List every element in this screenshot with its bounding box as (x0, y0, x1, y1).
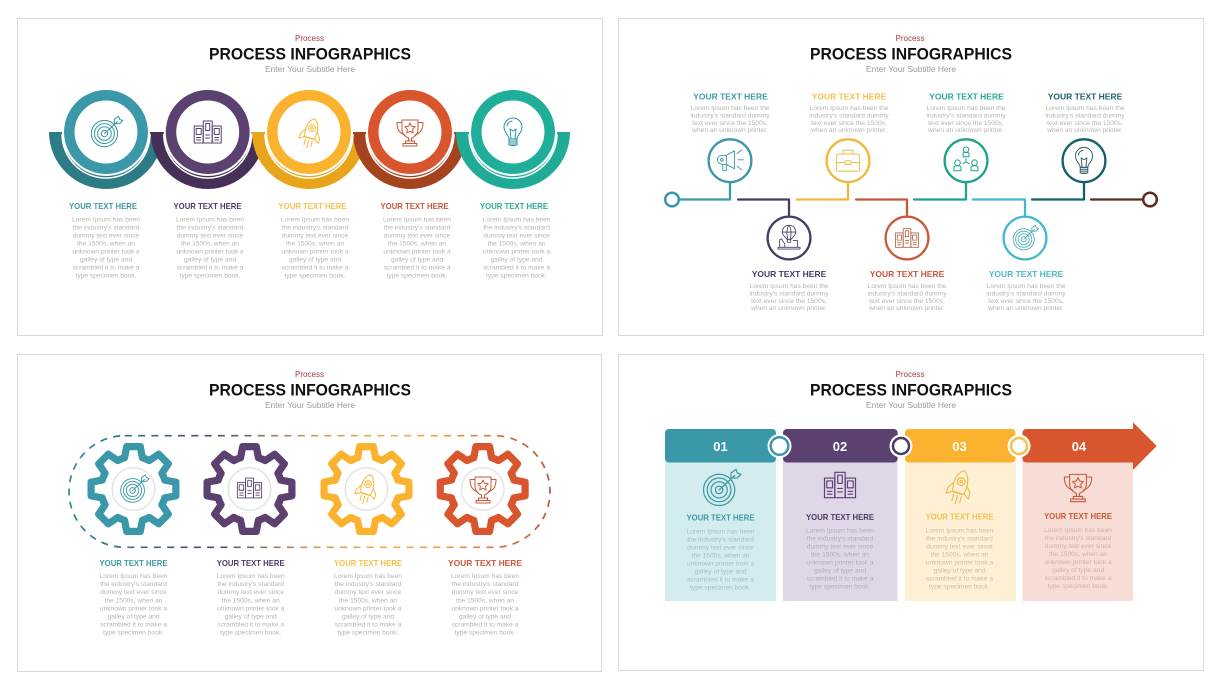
gear text 3: the 1500s, when an (339, 597, 397, 604)
timeline text 4: text ever since the 1500s, (869, 298, 945, 305)
timeline text 3: industry's standard dummy (809, 112, 889, 120)
gear text 2: galley of type and (225, 614, 277, 620)
card 03: YOUR TEXT HERE (926, 512, 994, 522)
timeline text 6: industry's standard dummy (986, 290, 1066, 298)
gear text 4: Lorem Ipsum has been (451, 573, 519, 580)
step 3 text: unknown printer took a (281, 248, 349, 256)
connector ring 2 (890, 434, 912, 458)
card 03: galley of type and (933, 568, 986, 574)
step 2 text: unknown printer took a (176, 248, 244, 256)
timeline text 6: text ever since the 1500s, (988, 298, 1064, 305)
card 01: the industry's standard (687, 536, 754, 544)
gear 3: rocket (324, 447, 409, 531)
card 01: 01 (713, 439, 728, 454)
step 5 text: dummy text ever since (483, 232, 550, 240)
panel: gear process (18, 354, 602, 672)
timeline text 4: when an unknown printer. (868, 305, 945, 312)
timeline connectors (679, 183, 1143, 216)
panel 3 header: PROCESS INFOGRAPHICS (209, 382, 411, 400)
panel 4 header (810, 370, 1012, 410)
half-ring chain (49, 132, 570, 189)
step 3 text: scrambled it to make a (282, 264, 349, 272)
card 01: dummy text ever since (687, 544, 754, 552)
gear text 3: galley of type and (342, 614, 394, 620)
gear text 1: the 1500s, when an (105, 597, 163, 604)
gear text 3: scrambled it to make a (335, 622, 402, 629)
card 04 with arrow header: unknown printer took a (1044, 559, 1112, 566)
timeline text 1: industry's standard dummy (690, 112, 770, 120)
panel 4 header: Process (896, 370, 924, 379)
timeline text 5: YOUR TEXT HERE (929, 92, 1004, 102)
card 03: the 1500s, when an (931, 552, 989, 558)
card 04 with arrow header: type specimen book. (1048, 583, 1109, 590)
step 4 text: the industry's standard (384, 224, 451, 232)
step 3 text: the 1500s, when an (286, 240, 344, 248)
panel 1 header: Enter Your Subtitle Here (265, 64, 355, 74)
card 02: unknown printer took a (806, 560, 874, 566)
gear text 4: unknown printer took a (451, 605, 519, 612)
node: bulb (1063, 139, 1105, 182)
step 1 text: the industry's standard (73, 224, 140, 232)
step 1 text (69, 201, 140, 280)
panel: timeline process (618, 18, 1204, 336)
panel 1 header: PROCESS INFOGRAPHICS (209, 46, 411, 64)
timeline text 7: text ever since the 1500s, (1047, 120, 1123, 127)
panel 2 header (810, 34, 1012, 74)
card 01: scrambled it to make a (687, 576, 754, 584)
gear text 4: the industry's standard (452, 581, 519, 588)
panel: numbered arrow process (618, 354, 1204, 670)
gear text 2 (217, 558, 285, 637)
step 1 text: the 1500s, when an (77, 240, 135, 248)
step 4 text: type specimen book. (387, 272, 448, 280)
panel 1 header (209, 34, 411, 74)
timeline text 1: Lorem Ipsum has been the (690, 105, 770, 112)
step 1 circle: target (62, 95, 150, 178)
timeline text 7 (1045, 92, 1125, 134)
card 03 (905, 429, 1016, 601)
panel 2 header: Process (896, 34, 924, 43)
panel 2 header: PROCESS INFOGRAPHICS (810, 46, 1012, 64)
connector ring 3 (1008, 434, 1030, 458)
timeline text 2: Lorem Ipsum has been the (750, 283, 829, 290)
timeline text 5: Lorem Ipsum has been the (926, 105, 1006, 112)
timeline text 2: YOUR TEXT HERE (752, 269, 827, 279)
step 4 text: scrambled it to make a (384, 264, 451, 272)
step 5 text: the industry's standard (483, 224, 550, 232)
panel 3 header (209, 370, 411, 410)
timeline text 1: YOUR TEXT HERE (693, 92, 768, 102)
step 5 text: type specimen book. (486, 272, 547, 280)
step 4 text: dummy text ever since (384, 232, 451, 240)
step 3 text: dummy text ever since (282, 232, 349, 240)
step 2 text: YOUR TEXT HERE (174, 201, 242, 211)
step 2 text: scrambled it to make a (177, 264, 244, 272)
card 04 with arrow header: the 1500s, when an (1049, 551, 1107, 558)
node: megaphone (709, 139, 751, 182)
gear text 4: scrambled it to make a (452, 622, 519, 629)
card 04 with arrow header: the industry's standard (1045, 535, 1112, 542)
step 3 text: Lorem Ipsum has been (281, 216, 349, 224)
card 02: 02 (833, 439, 847, 454)
step 2 text (174, 201, 244, 280)
card 03: type specimen book. (929, 584, 990, 590)
timeline text 5: when an unknown printer. (927, 127, 1004, 134)
card 02 (783, 429, 898, 601)
timeline text 2 (749, 269, 829, 312)
panel 2 header: Enter Your Subtitle Here (866, 64, 956, 74)
timeline text 4: Lorem Ipsum has been the (868, 283, 947, 290)
gear text 4: dummy text ever since (452, 589, 519, 596)
panel 4 header: Enter Your Subtitle Here (866, 400, 956, 410)
gear text 1: Lorem Ipsum has been (100, 573, 168, 580)
timeline text 6: Lorem Ipsum has been the (986, 283, 1066, 290)
timeline text 5: industry's standard dummy (926, 112, 1006, 120)
card 01: Lorem Ipsum has been (687, 528, 755, 536)
step 3 text: type specimen book. (285, 272, 346, 280)
step 3 circle: rocket (265, 95, 353, 178)
gear text 1: the industry's standard (100, 581, 167, 588)
connector ring 1 (768, 434, 792, 458)
card 02: the 1500s, when an (811, 552, 869, 558)
card 01 (665, 429, 776, 601)
gear text 1 (100, 558, 168, 637)
card 02: Lorem Ipsum has been (806, 528, 874, 534)
timeline text 5 (926, 92, 1006, 134)
timeline text 3: Lorem Ipsum has been the (810, 105, 889, 112)
timeline text 7: Lorem Ipsum has been the (1046, 105, 1125, 112)
step 5 text: the 1500s, when an (488, 240, 546, 248)
timeline text 4: YOUR TEXT HERE (870, 269, 945, 279)
gear text 3: Lorem Ipsum has been (334, 573, 402, 580)
timeline text 5: text ever since the 1500s, (928, 120, 1004, 127)
card 03: scrambled it to make a (926, 576, 993, 582)
step 2 text: dummy text ever since (177, 232, 244, 240)
gear text 3: YOUR TEXT HERE (334, 558, 402, 568)
card 03: unknown printer took a (926, 560, 993, 566)
gear text 2: unknown printer took a (217, 605, 285, 612)
node: buildings (886, 217, 928, 259)
card 03: the industry's standard (926, 536, 993, 542)
panel: circular process (18, 18, 602, 336)
step 1 text: Lorem Ipsum has been (72, 216, 140, 224)
step 2 text: galley of type and (184, 256, 236, 264)
timeline text 6: when an unknown printer. (987, 305, 1064, 312)
step 2 text: type specimen book. (180, 272, 241, 280)
card 02: scrambled it to make a (807, 576, 874, 582)
card 02: galley of type and (814, 568, 866, 574)
gear text 1: galley of type and (107, 614, 160, 620)
step 5 text (480, 201, 551, 280)
gear text 3: type specimen book. (338, 630, 399, 637)
gear text 2: Lorem Ipsum has been (217, 573, 285, 580)
gear text 2: dummy text ever since (217, 589, 284, 596)
timeline text 1: when an unknown printer. (691, 127, 768, 134)
step 5 text: galley of type and (490, 256, 543, 264)
step 2 text: Lorem Ipsum has been (176, 216, 244, 224)
step 5 text: Lorem Ipsum has been (483, 216, 551, 224)
gear text 4: the 1500s, when an (456, 597, 514, 604)
card 04 with arrow header: dummy text ever since (1045, 543, 1112, 550)
step 4 circle: trophy (366, 95, 454, 178)
node: balloon (768, 217, 810, 259)
node: briefcase (827, 139, 869, 182)
card 01: the 1500s, when an (692, 552, 750, 560)
card 03: dummy text ever since (926, 544, 993, 550)
timeline text 6: YOUR TEXT HERE (989, 269, 1064, 279)
gear text 2: type specimen book. (220, 630, 281, 637)
step 4 text: the 1500s, when an (388, 240, 446, 248)
gear text 3: unknown printer took a (334, 605, 402, 612)
card 03: Lorem Ipsum has been (926, 528, 994, 534)
gear text 1: scrambled it to make a (100, 622, 167, 629)
step 3 text: YOUR TEXT HERE (278, 201, 347, 211)
gear text 1: YOUR TEXT HERE (100, 558, 168, 568)
timeline text 2: text ever since the 1500s, (751, 298, 827, 305)
card 04 with arrow header: YOUR TEXT HERE (1044, 511, 1112, 521)
step 2 text: the industry's standard (177, 224, 244, 232)
timeline text 3: when an unknown printer. (810, 127, 887, 134)
step 4 text (380, 201, 451, 280)
timeline end node (1143, 193, 1157, 206)
step 4 text: unknown printer took a (383, 248, 451, 256)
card 02: YOUR TEXT HERE (806, 512, 874, 522)
timeline text 1 (690, 92, 770, 134)
timeline text 7: when an unknown printer. (1046, 127, 1123, 134)
step 5 text: YOUR TEXT HERE (480, 201, 548, 211)
panel 3 header: Process (295, 370, 324, 379)
card 03: 03 (952, 439, 967, 454)
card 04 with arrow header: galley of type and (1052, 567, 1104, 574)
gear text 3: the industry's standard (335, 581, 402, 588)
step 1 text: dummy text ever since (73, 232, 140, 240)
step 1 text: unknown printer took a (72, 248, 140, 256)
gear text 2: YOUR TEXT HERE (217, 558, 285, 568)
card 04 with arrow header (1022, 422, 1157, 601)
gear text 4: galley of type and (459, 614, 511, 620)
gear text 2: the industry's standard (217, 581, 284, 588)
card 04 with arrow header: 04 (1072, 439, 1087, 454)
timeline text 2: industry's standard dummy (749, 290, 829, 298)
panel 1 header: Process (295, 34, 324, 43)
dashed capsule outline (69, 436, 550, 547)
gear text 2: scrambled it to make a (217, 622, 284, 629)
gear text 3: dummy text ever since (335, 589, 402, 596)
timeline text 7: YOUR TEXT HERE (1048, 92, 1123, 102)
step 2 circle: buildings (164, 95, 252, 178)
step 1 text: YOUR TEXT HERE (69, 201, 137, 211)
timeline text 4 (867, 269, 947, 312)
card 04 with arrow header: Lorem Ipsum has been (1044, 527, 1112, 534)
timeline text 1: text ever since the 1500s, (692, 120, 768, 127)
step 1 text: scrambled it to make a (73, 264, 140, 272)
step 2 text: the 1500s, when an (181, 240, 239, 248)
timeline text 2: when an unknown printer. (750, 305, 827, 312)
step 3 text (278, 201, 349, 280)
timeline start node (665, 193, 679, 206)
step 3 text: galley of type and (289, 256, 341, 264)
timeline text 3 (809, 92, 889, 134)
timeline text 7: industry's standard dummy (1045, 112, 1125, 120)
timeline text 3: YOUR TEXT HERE (812, 92, 887, 102)
gear 2: buildings (207, 447, 292, 531)
node: team (945, 139, 987, 182)
step 5 text: scrambled it to make a (483, 264, 550, 272)
step 4 text: YOUR TEXT HERE (380, 201, 449, 211)
node: target (1004, 217, 1046, 259)
card 02: dummy text ever since (807, 544, 874, 550)
gear text 1: type specimen book. (103, 630, 164, 637)
card 01: YOUR TEXT HERE (686, 512, 755, 522)
step 5 circle: bulb (469, 95, 557, 178)
card 01: galley of type and (694, 568, 747, 576)
timeline text 3: text ever since the 1500s, (811, 120, 887, 127)
step 3 text: the industry's standard (282, 224, 349, 232)
gear text 3 (334, 558, 402, 637)
gear text 4 (448, 558, 522, 637)
card 02: type specimen book. (810, 584, 871, 590)
gear 1: target (91, 447, 176, 531)
gear text 4: type specimen book. (455, 630, 516, 637)
timeline text 6 (986, 269, 1066, 312)
gear text 1: dummy text ever since (100, 589, 167, 596)
panel 3 header: Enter Your Subtitle Here (265, 400, 355, 410)
panel 4 header: PROCESS INFOGRAPHICS (810, 382, 1012, 400)
timeline text 4: industry's standard dummy (867, 290, 947, 298)
gear text 2: the 1500s, when an (222, 597, 280, 604)
gear 4: trophy (440, 447, 525, 531)
card 01: type specimen book. (690, 584, 751, 592)
card 04 with arrow header: scrambled it to make a (1045, 575, 1112, 582)
step 5 text: unknown printer took a (483, 248, 550, 256)
card 01: unknown printer took a (687, 560, 754, 568)
gear text 4: YOUR TEXT HERE (448, 558, 522, 568)
gear text 1: unknown printer took a (100, 605, 167, 612)
step 4 text: galley of type and (391, 256, 443, 264)
step 4 text: Lorem Ipsum has been (383, 216, 451, 224)
card 02: the industry's standard (807, 536, 874, 542)
step 1 text: galley of type and (80, 256, 132, 264)
step 1 text: type specimen book. (76, 272, 137, 280)
